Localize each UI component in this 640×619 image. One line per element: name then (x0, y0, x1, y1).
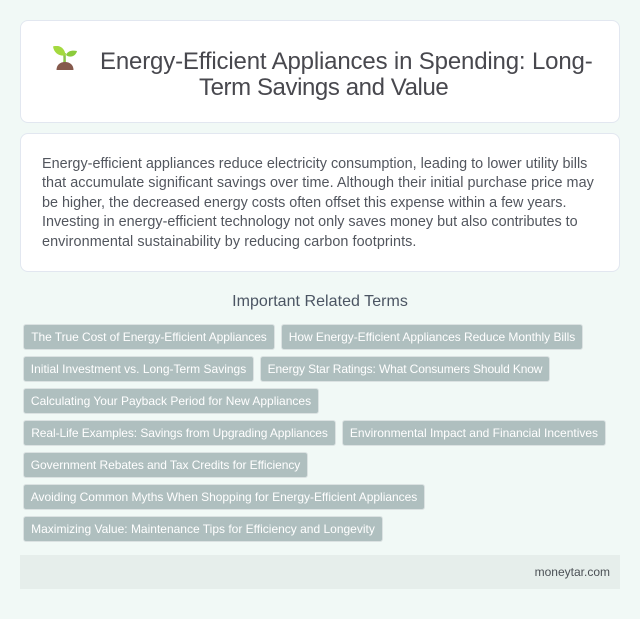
chip (342, 420, 606, 446)
chip: Government Rebates and Tax Credits for Efficiency (31, 458, 300, 472)
title text: Term Savings and Value (199, 74, 448, 101)
chip (23, 484, 425, 510)
summary text (42, 156, 594, 250)
summary text: be higher, the decreased energy costs often offset this expense within a few years. (42, 195, 566, 211)
chip: Initial Investment vs. Long-Term Savings (31, 362, 246, 376)
chip (260, 356, 550, 382)
chip: How Energy-Efficient Appliances Reduce Monthly Bills (289, 330, 575, 344)
title panel (20, 20, 620, 123)
chip (23, 516, 383, 542)
summary text: Energy-efficient appliances reduce electricity consumption, leading to lower utility bills (42, 156, 587, 172)
icon: sprout (53, 46, 77, 70)
chip (23, 388, 319, 414)
chip: Avoiding Common Myths When Shopping for Energy-Efficient Appliances (31, 490, 417, 504)
summary text: that accumulate significant savings over time. Although their initial purchase price may (42, 175, 594, 191)
chip: The True Cost of Energy-Efficient Appliances (31, 330, 267, 344)
chip: Environmental Impact and Financial Incentives (350, 426, 598, 440)
footer source text: moneytar.com (535, 565, 610, 579)
summary panel (20, 133, 620, 272)
title text: Energy-Efficient Appliances in Spending: Long- (100, 48, 593, 75)
title text (100, 48, 593, 101)
chip (23, 324, 275, 350)
chip: Real-Life Examples: Savings from Upgrading Appliances (31, 426, 328, 440)
related terms heading: Important Related Terms (232, 293, 408, 310)
chip (23, 452, 308, 478)
chip (23, 420, 336, 446)
summary text: Investing in energy-efficient technology not only saves money but also contributes to (42, 214, 578, 230)
chip: Calculating Your Payback Period for New Appliances (31, 394, 311, 408)
chip (23, 356, 254, 382)
chip: Energy Star Ratings: What Consumers Should Know (268, 362, 542, 376)
summary text: environmental sustainability by reducing carbon footprints. (42, 234, 416, 250)
chip (281, 324, 583, 350)
related terms chips (23, 324, 606, 542)
chip: Maximizing Value: Maintenance Tips for Efficiency and Longevity (31, 522, 375, 536)
footer bar (20, 555, 620, 589)
